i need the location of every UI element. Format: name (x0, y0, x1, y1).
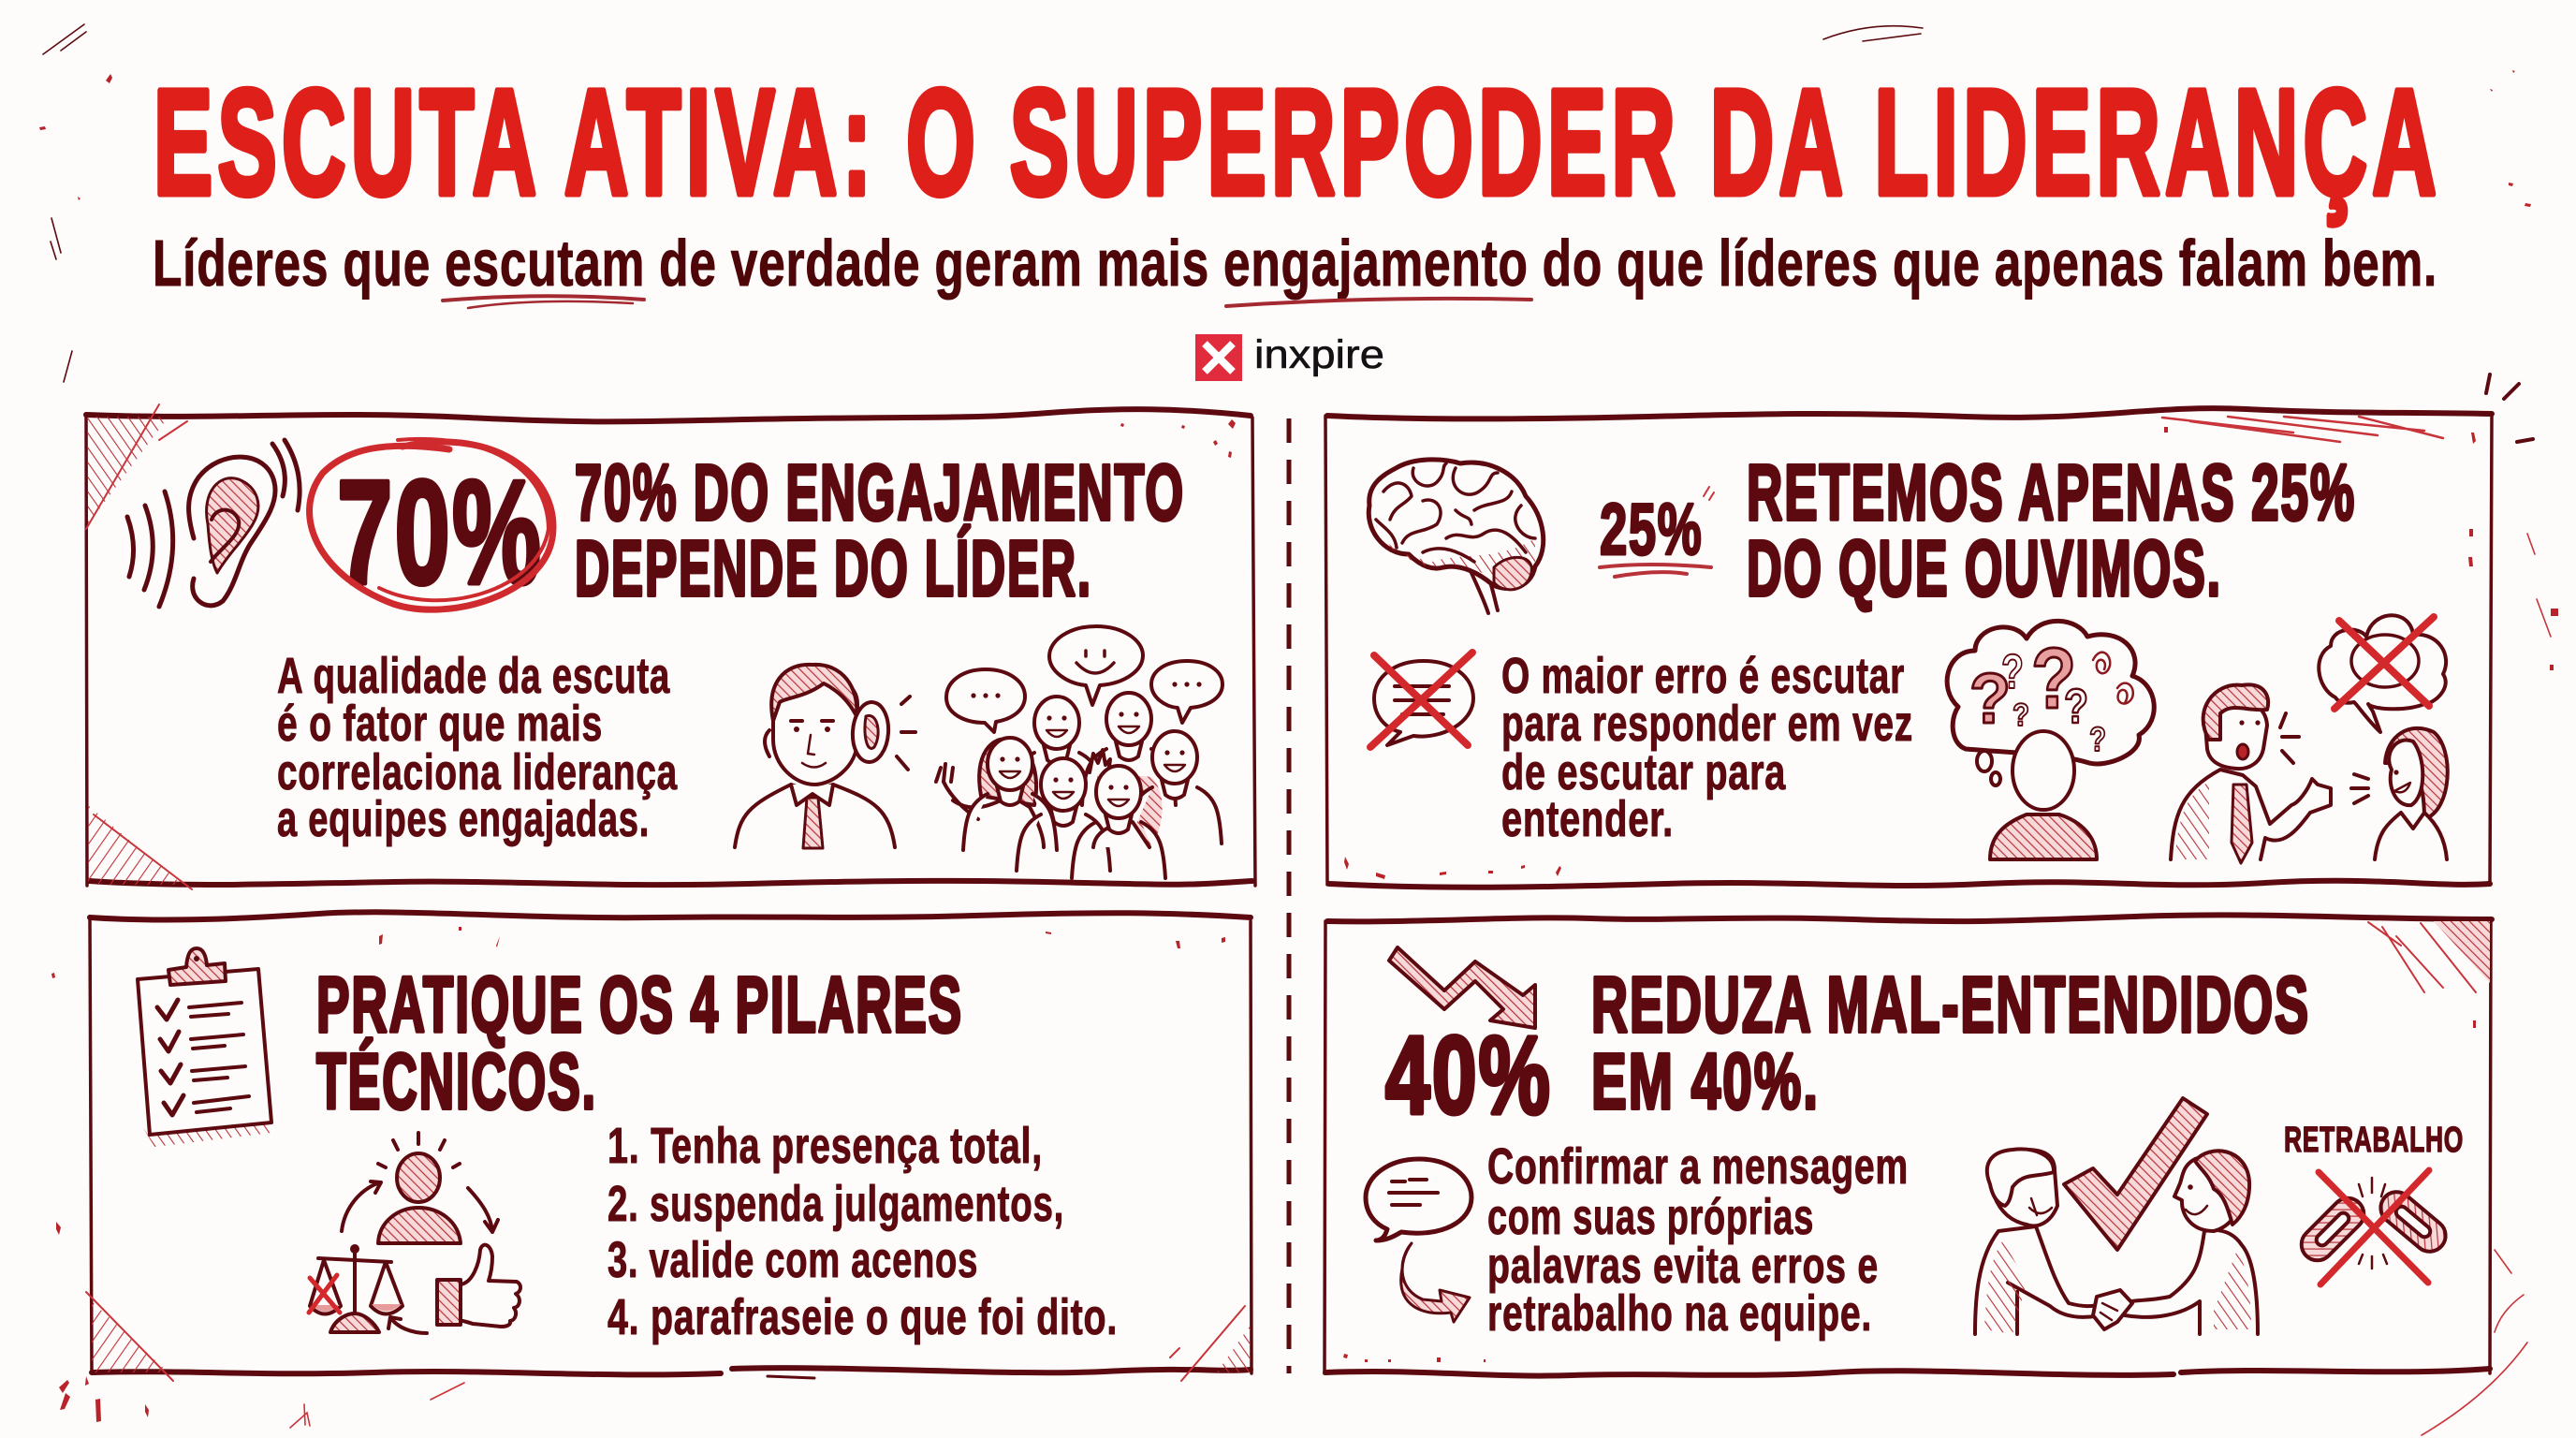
illustration: confused thinker: ? (2001, 645, 2024, 699)
illustration: engaged team with speech bubbles (936, 626, 1222, 878)
label: retrabalho: RETRABALHO (2284, 1121, 2464, 1160)
body text: de escutar para (1501, 744, 1786, 800)
body text (277, 648, 678, 847)
illustration: confused thinker: ? (1969, 659, 2011, 739)
icon: ear with sound waves (127, 440, 300, 607)
icon: crossed thought bubble (2319, 615, 2446, 732)
heading: 70% DO ENGAJAMENTO (575, 448, 1185, 536)
illustration: confused thinker: ? (2012, 697, 2029, 733)
logo: inxpire: inxpire (1254, 332, 1384, 377)
panel: 25% retention (1325, 408, 2558, 888)
heading: PRATIQUE OS 4 PILARES (316, 961, 963, 1049)
logo: inxpire (1195, 332, 1384, 381)
heading: TÉCNICOS. (316, 1037, 597, 1125)
body text (1487, 1138, 1909, 1342)
four pillars list: 4. parafraseie o que foi dito. (607, 1289, 1118, 1345)
body text: a equipes engajadas. (277, 791, 650, 847)
four pillars list: 2. suspenda julgamentos, (607, 1176, 1064, 1232)
body text: é o fator que mais (277, 696, 603, 752)
panel: 4 technical pillars (86, 912, 1251, 1381)
icon: listening cycle (309, 1133, 520, 1333)
icon: brain (1368, 460, 1544, 613)
four pillars list: 1. Tenha presença total, (607, 1118, 1043, 1174)
stat: 40%: 40% (1385, 1014, 1552, 1137)
icon: crossed speech bubble (1370, 653, 1473, 747)
heading (1747, 448, 2356, 612)
body text: retrabalho na equipe. (1487, 1285, 1872, 1342)
heading (1591, 961, 2310, 1125)
body text: palavras evita erros e (1487, 1238, 1879, 1294)
body text: O maior erro é escutar (1501, 648, 1905, 704)
icon: falling zigzag arrow (1389, 947, 1535, 1028)
heading (316, 961, 963, 1125)
big number 70% with red circle (310, 439, 553, 615)
body text: A qualidade da escuta (277, 648, 670, 704)
heading: EM 40%. (1591, 1037, 1820, 1125)
icon: broken chain crossed out (2295, 1170, 2452, 1284)
illustration: confused thinker: ? (2031, 631, 2076, 726)
body text: para responder em vez (1501, 696, 1913, 752)
illustration: talking man and woman (2171, 684, 2448, 863)
body text: com suas próprias (1487, 1189, 1814, 1245)
stat: 25% with underline: 25% (1600, 488, 1703, 570)
icon: speech bubble with return arrow (1366, 1159, 1471, 1322)
body text: entender. (1501, 791, 1674, 847)
panel: reduce misunderstandings (1325, 915, 2492, 1376)
heading: DEPENDE DO LÍDER. (575, 524, 1092, 612)
body text: Confirmar a mensagem (1487, 1138, 1909, 1195)
four pillars list: 3. valide com acenos (607, 1232, 978, 1288)
illustration: confused thinker (1947, 621, 2154, 859)
vertical dashed divider (1286, 418, 1292, 1373)
heading (575, 448, 1185, 612)
four pillars list (607, 1118, 1118, 1345)
illustration: listening leader (735, 665, 915, 848)
panel: 70% engagement (86, 404, 1255, 889)
illustration: confused thinker: ? (2089, 720, 2106, 758)
heading: DO QUE OUVIMOS. (1747, 524, 2222, 612)
body text: correlaciona liderança (277, 744, 678, 800)
illustration: confused thinker: ? (2064, 680, 2088, 734)
big number 70% with red circle: 70% (337, 450, 543, 615)
icon: clipboard checklist (138, 948, 273, 1147)
body text (1501, 648, 1913, 847)
illustration: handshake and check mark (1975, 1098, 2258, 1334)
